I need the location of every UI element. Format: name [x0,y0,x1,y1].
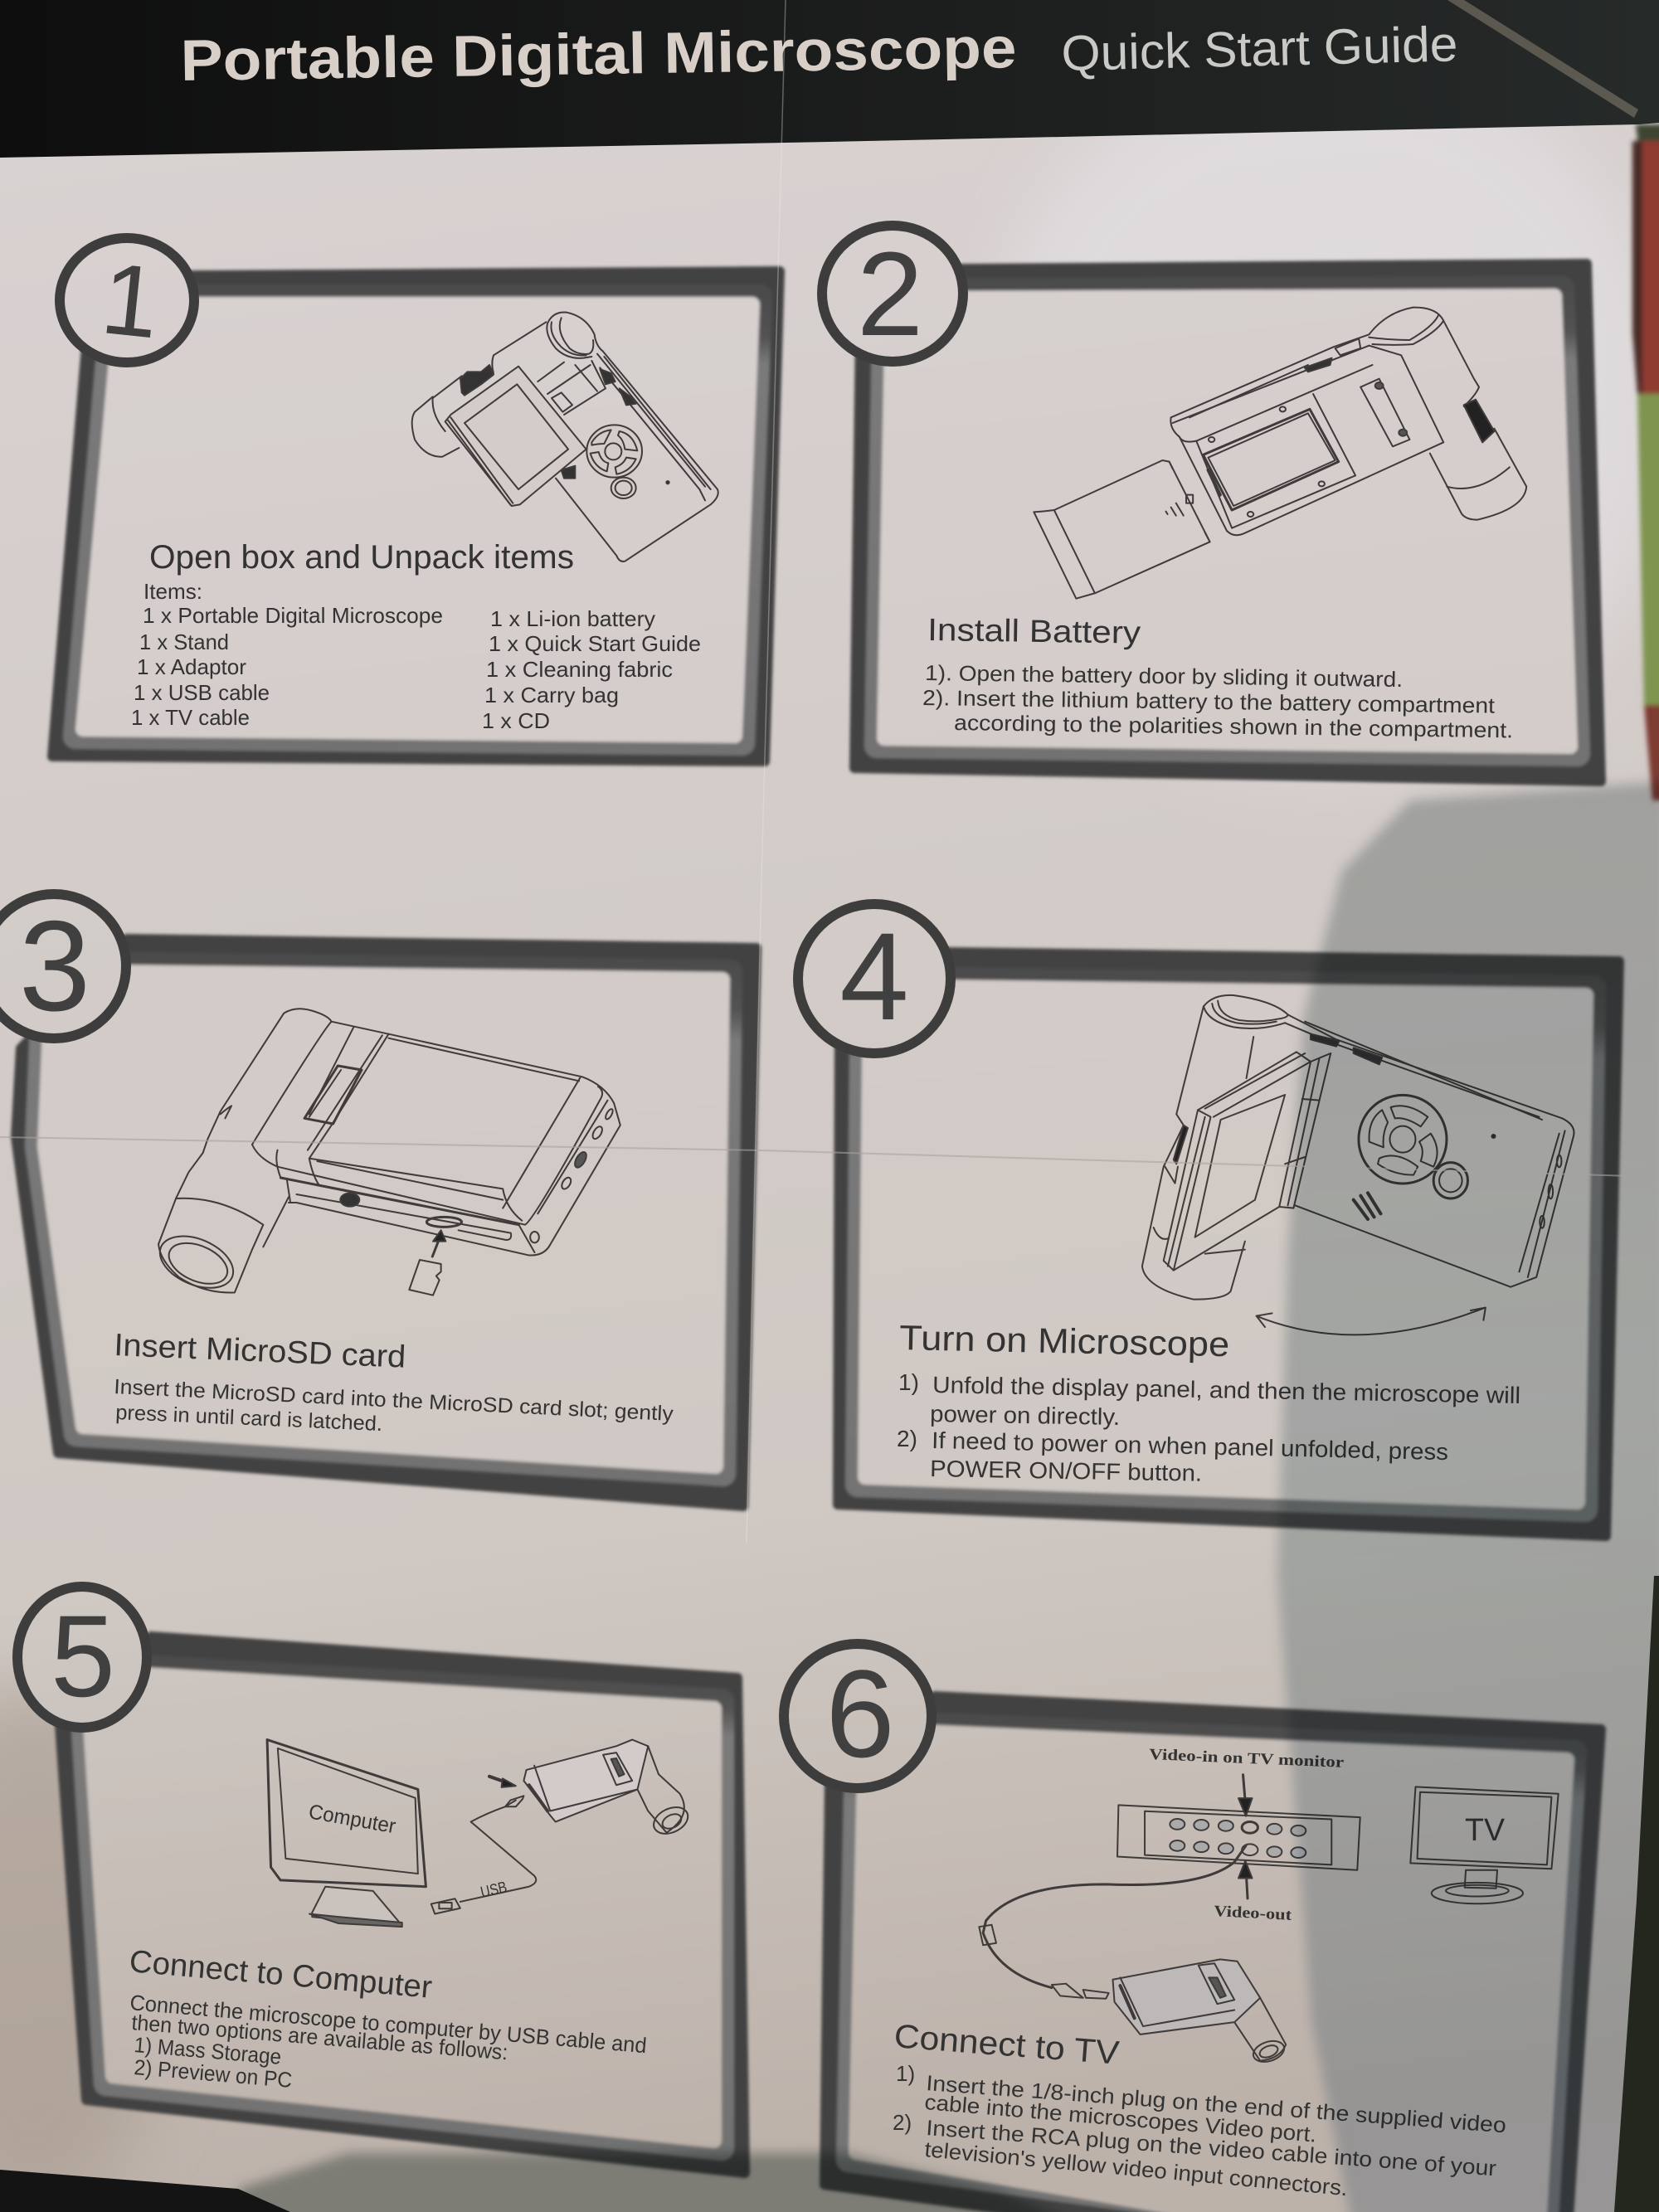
background outside sheet at right edge [1614,124,1659,2212]
heading 2: Install Battery [927,613,1141,651]
frame 2 [854,264,1601,781]
instructions 4 [897,1369,1520,1486]
illustration: computer and USB cable [267,1740,694,1927]
illustration: microSD slot [149,1009,620,1299]
instructions 4: 2) [897,1426,917,1451]
number badge 6: 6 [825,1644,895,1783]
illustration: TV connection [979,1775,1559,2066]
horizontal fold line [0,1137,1632,1176]
instructions 5: 1) Mass Storage [133,2032,282,2069]
instructions 6: 2) [893,2110,912,2135]
instructions 5: 2) Preview on PC [133,2054,293,2093]
panel 4: turn on [798,904,1619,1536]
item list left: Items: [144,579,202,604]
subtitle: Quick Start Guide [1061,16,1458,81]
number badge 1: 1 [97,241,164,359]
header band [0,0,1659,158]
item list right: 1 x CD [482,708,550,733]
instructions 2: according to the polarities shown in the compartment. [954,710,1513,742]
label: video-out: Video-out [1214,1903,1292,1924]
frame 3 [16,939,757,1506]
heading 5: Connect to Computer [128,1944,434,2005]
heading 3: Insert MicroSD card [114,1328,406,1375]
panel 6: connect to TV [784,1644,1601,2212]
label: video-in: Video-in on TV monitor [1149,1746,1345,1772]
item list left: 1 x Portable Digital Microscope [143,603,443,628]
instructions 4: Unfold the display panel, and then the microscope will [932,1372,1520,1408]
frame 1 [52,271,780,761]
warm shading lower left [0,1684,174,2212]
instructions 6: Insert the 1/8-inch plug on the end of the supplied video [926,2070,1507,2137]
instructions 2 [922,660,1513,742]
number badge 3: 3 [19,894,90,1038]
number badge 2 [822,226,963,362]
heading 4: Turn on Microscope [899,1318,1230,1364]
number badge 5: 5 [51,1591,115,1721]
number badge 5 [17,1587,147,1728]
illustration: unfolded display [1142,995,1574,1334]
item list right: 1 x Cleaning fabric [486,657,673,682]
item list left: 1 x Stand [139,630,229,654]
number badge 2: 2 [857,227,923,361]
panel 5: connect to computer [17,1587,745,2173]
instructions 3: press in until card is latched. [115,1401,383,1436]
item list right: 1 x Carry bag [484,683,619,707]
vertical fold line [747,0,786,1543]
USB label: USB [479,1879,508,1902]
item list right: 1 x Li-ion battery [490,606,655,631]
number badge 6 [784,1644,932,1788]
item list left: 1 x Adaptor [137,654,246,679]
instructions 4: 1) [898,1369,919,1395]
header fold highlight [1447,0,1638,118]
number badge 4 [798,904,951,1053]
item list left: 1 x USB cable [134,680,270,705]
item list right [482,606,701,733]
item list left [131,579,443,730]
frame 6 [825,1696,1601,2212]
bright paper upper right [979,58,1659,771]
cast shadow on lower edge [238,2153,1078,2212]
number badge 1 [60,238,194,362]
instructions 6: 1) [896,2061,915,2086]
number badge 4: 4 [839,907,909,1046]
instructions 6: Insert the RCA plug on the video cable into one of your [926,2115,1497,2180]
item list right: 1 x Quick Start Guide [489,631,701,656]
instructions 6 [893,2061,1507,2200]
instructions 5: Connect the microscope to computer by USB cable and [129,1990,648,2058]
frame 5 [60,1636,745,2173]
instructions 6: cable into the microscopes Video port. [923,2089,1317,2147]
label: TV: TV [1465,1813,1506,1848]
panel 2: install battery [822,226,1601,781]
instructions 4: POWER ON/OFF button. [930,1456,1202,1486]
instructions 4: If need to power on when panel unfolded, press [932,1427,1448,1465]
instructions 2: 2). Insert the lithium battery to the battery compartment [922,685,1496,718]
monitor label: Computer [307,1800,397,1838]
cast shadow on right of sheet [1277,781,1659,2212]
instructions 4: power on directly. [930,1401,1120,1430]
table edge lower left [0,2170,290,2212]
frame 4 [838,952,1619,1536]
title: Portable Digital Microscope [180,15,1017,93]
instructions 6: television's yellow video input connectors. [923,2137,1349,2200]
instructions 2: 1). Open the battery door by sliding it outward. [925,660,1403,692]
number badge 3 [0,894,126,1038]
illustration: microscope with screen [412,312,718,562]
instructions 5 [129,1990,648,2093]
heading 6: Connect to TV [893,2018,1121,2072]
instructions 5: then two options are available as follows: [131,2010,508,2064]
panel 1: open box [52,238,780,761]
item list left: 1 x TV cable [131,705,250,730]
heading 1: Open box and Unpack items [149,539,574,576]
illustration: battery door open [1034,308,1526,599]
instructions 3: Insert the MicroSD card into the MicroSD card slot; gently [114,1375,674,1426]
panel 3: insert card [0,894,757,1506]
